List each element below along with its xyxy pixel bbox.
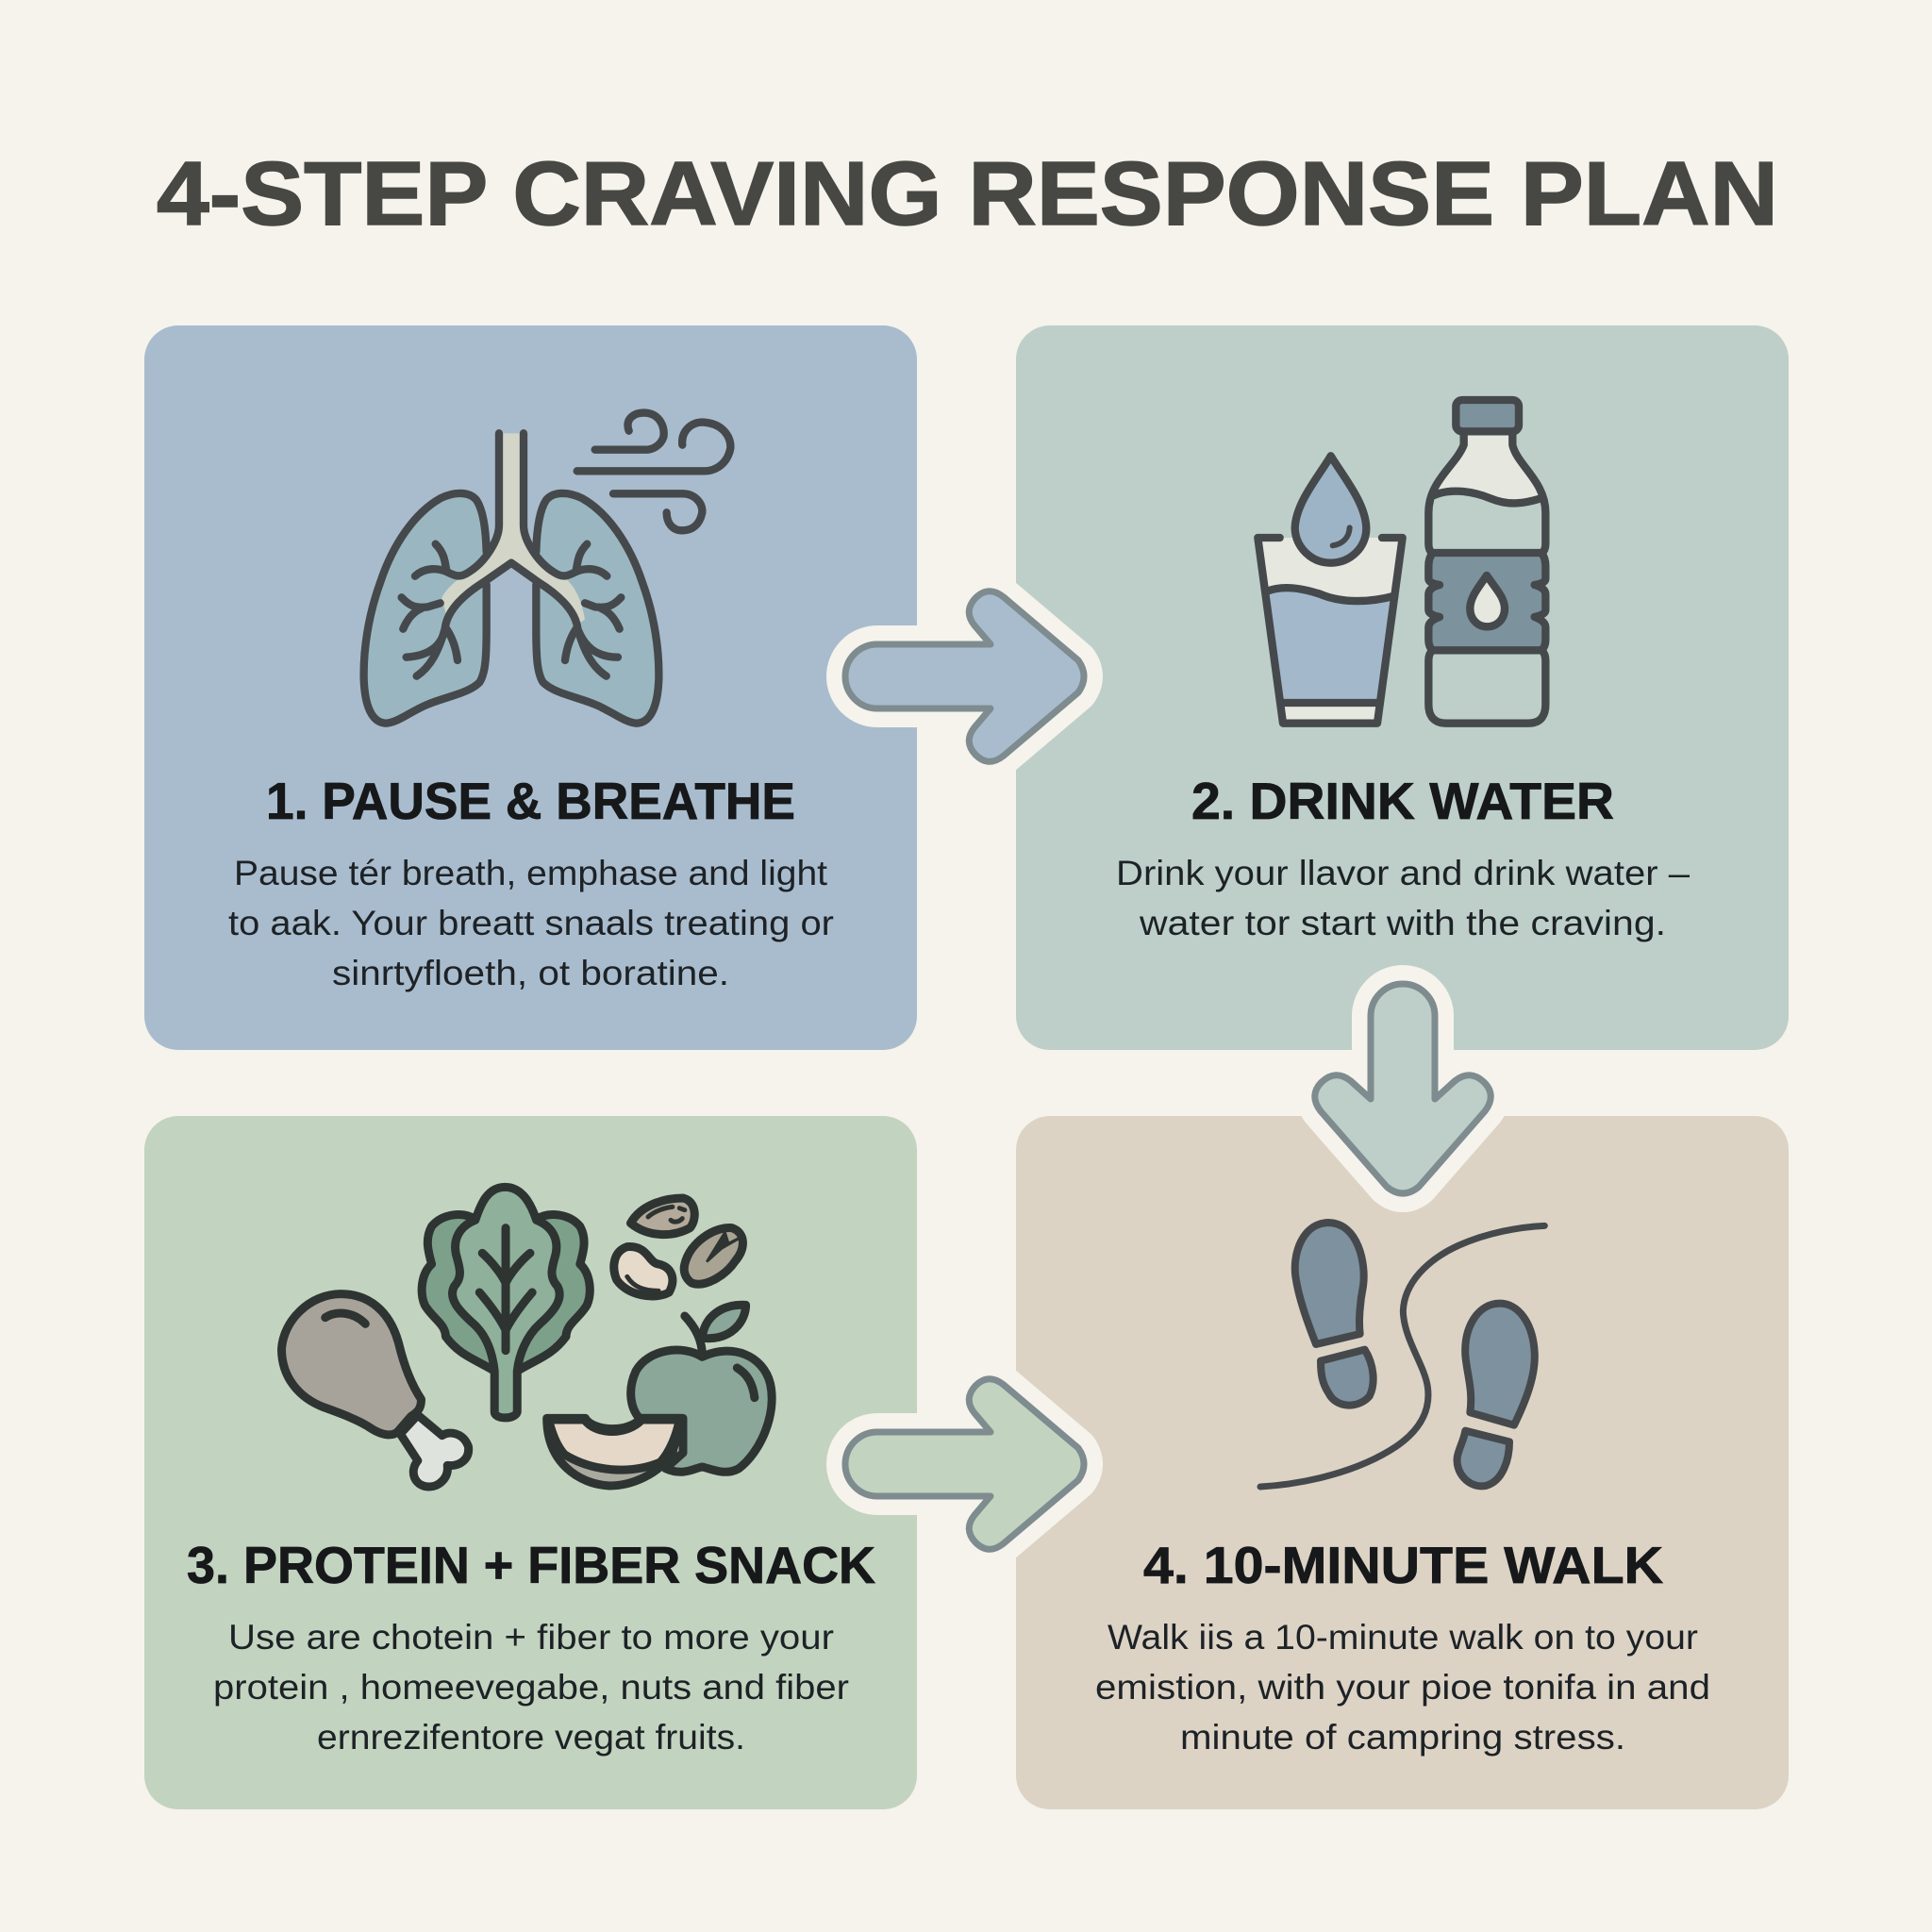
text: step 4 description: emistion, with your pioe tonifa in and xyxy=(1095,1667,1710,1707)
icon: leafy greens xyxy=(422,1187,590,1418)
icon: lungs with breath xyxy=(364,413,730,724)
arrow: step 2 to step 4 xyxy=(1315,984,1491,1193)
heading: step 3: 3. PROTEIN + FIBER SNACK xyxy=(187,1536,875,1594)
text: step 3 description: Use are chotein + fiber to more your xyxy=(228,1617,834,1657)
text: step 4 description xyxy=(1095,1617,1710,1757)
panel: step 3 protein and fiber snack xyxy=(144,1116,917,1809)
panel: step 1 pause and breathe xyxy=(144,325,917,1050)
text: step 1 description: Pause tér breath, emphase and light xyxy=(234,853,828,892)
icon: chicken drumstick xyxy=(281,1294,469,1487)
icon: melon slice xyxy=(547,1418,681,1486)
arrow: step 1 to step 2 xyxy=(845,591,1084,761)
text: step 2 description: water tor start with the craving. xyxy=(1139,903,1666,942)
icon: glass and water bottle xyxy=(1257,400,1545,724)
text: step 3 description xyxy=(213,1617,849,1757)
heading: step 2: 2. DRINK WATER xyxy=(1191,772,1614,830)
text: step 4 description: Walk iis a 10-minute walk on to your xyxy=(1108,1617,1698,1657)
title: 4-STEP CRAVING RESPONSE PLAN xyxy=(157,143,1778,244)
icon: footprints and path xyxy=(1260,1223,1544,1487)
text: step 3 description: protein , homeevegabe, nuts and fiber xyxy=(213,1667,849,1707)
text: step 1 description: to aak. Your breatt snaals treating or xyxy=(228,903,834,942)
text: step 4 description: minute of campring stress. xyxy=(1180,1717,1625,1757)
panel: step 4 ten-minute walk xyxy=(1016,1116,1789,1809)
arrow: step 3 to step 4 xyxy=(845,1379,1084,1549)
heading: step 4: 4. 10-MINUTE WALK xyxy=(1143,1536,1663,1594)
panel: step 2 drink water xyxy=(1016,325,1789,1050)
text: step 1 description xyxy=(228,853,834,992)
icon: nuts and beans xyxy=(614,1198,742,1296)
text: step 2 description: Drink your llavor and drink water – xyxy=(1116,853,1690,892)
heading: step 1: 1. PAUSE & BREATHE xyxy=(266,772,795,830)
text: step 1 description: sinrtyfloeth, ot boratine. xyxy=(332,953,729,992)
text: step 3 description: ernrezifentore vegat fruits. xyxy=(317,1717,745,1757)
icon: healthy foods xyxy=(281,1187,772,1487)
icon: apple xyxy=(631,1305,772,1472)
text: step 2 description xyxy=(1116,853,1690,942)
